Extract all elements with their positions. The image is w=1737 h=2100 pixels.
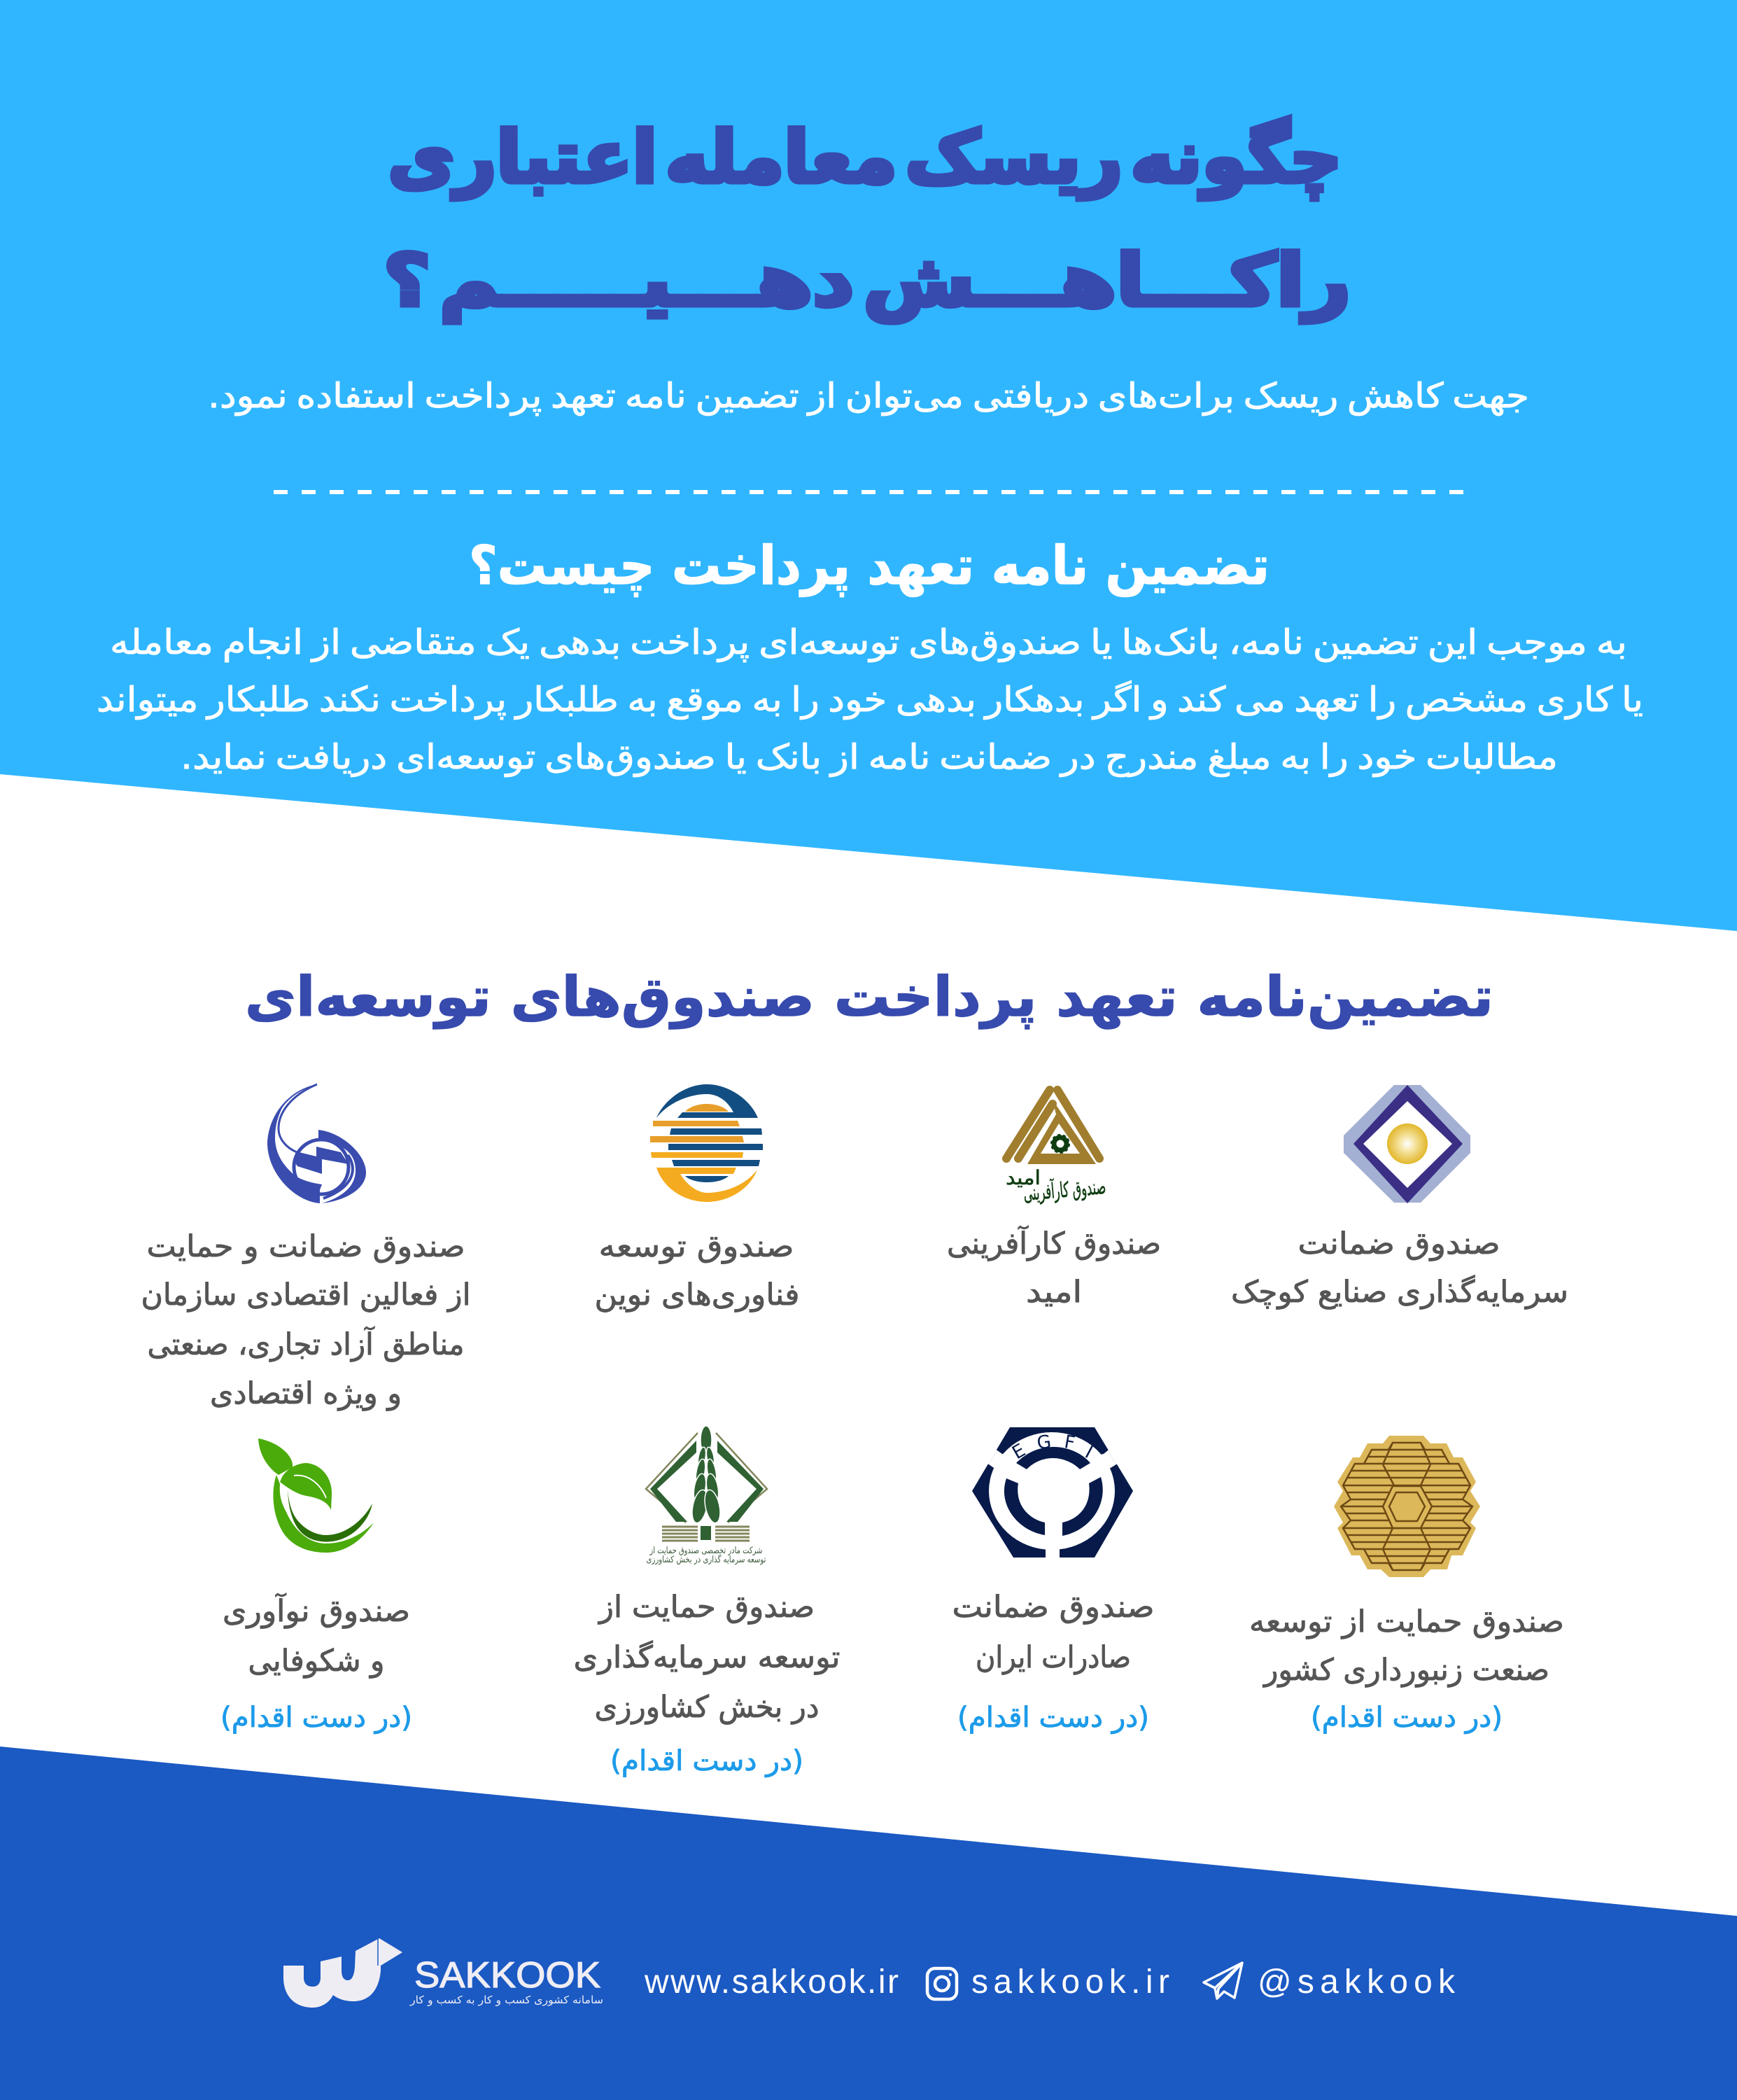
- title: چگونه ریسک معامله اعتباری: [388, 116, 1342, 200]
- instagram handle: sakkook.ir: [971, 1963, 1169, 2001]
- fund 5 label: صندوق حمایت از توسعه: [1249, 1604, 1564, 1639]
- panel: fund 7 agriculture: [574, 1426, 840, 1777]
- body paragraph: [97, 622, 1643, 777]
- panel: top light-blue header band: [0, 0, 1737, 931]
- panel: fund 4 free zones: [141, 1084, 470, 1411]
- icon: striped globe logo: [650, 1084, 763, 1202]
- heading: what is a payment guarantee: تضمین نامه تعهد پرداخت چیست؟: [469, 534, 1270, 597]
- fund 4 label: مناطق آزاد تجاری، صنعتی: [147, 1326, 465, 1362]
- heading: development funds: تضمین‌نامه تعهد پرداخت صندوق‌های توسعه‌ای: [245, 966, 1493, 1029]
- panel: fund 5 beekeeping: [1249, 1436, 1564, 1734]
- fund 6 status: (در دست اقدام): [957, 1702, 1149, 1734]
- fund 3 label: [595, 1229, 799, 1312]
- fund 5 label: صنعت زنبورداری کشور: [1263, 1653, 1549, 1688]
- icon: wheat logo: [646, 1426, 767, 1565]
- fund 8 label: و شکوفایی: [248, 1644, 385, 1679]
- panel: fund 8 innovation: [220, 1438, 412, 1734]
- fund 7 status: (در دست اقدام): [610, 1745, 803, 1777]
- website: www.sakkook.ir: [644, 1963, 899, 2001]
- fund 1 label: سرمایه‌گذاری صنایع کوچک: [1231, 1275, 1568, 1310]
- icon: diamond logo: [1344, 1085, 1470, 1203]
- fund 8 status: (در دست اقدام): [220, 1702, 412, 1734]
- fund 2 label: صندوق کارآفرینی: [947, 1225, 1161, 1261]
- fund 7 label: توسعه سرمایه‌گذاری: [574, 1640, 840, 1675]
- title: [384, 116, 1351, 323]
- icon: Omid triangle logo: [1006, 1090, 1106, 1206]
- icon: wheat logo: توسعه سرمایه گذاری در بخش کشاورزی: [647, 1554, 766, 1565]
- icon: EGFI hexagon logo: [969, 1427, 1135, 1559]
- fund 6 label: صندوق ضمانت: [952, 1590, 1155, 1625]
- telegram handle: @sakkook: [1258, 1963, 1456, 2001]
- icon: Sakkook logo mark: [283, 1938, 402, 2008]
- fund 5 status: (در دست اقدام): [1311, 1702, 1503, 1734]
- body paragraph: مطالبات خود را به مبلغ مندرج در ضمانت نامه از بانک یا صندوق‌های توسعه‌ای دریافت نماید.: [181, 737, 1558, 777]
- icon: telegram plane: [1204, 1963, 1242, 1998]
- body paragraph: یا کاری مشخص را تعهد می کند و اگر بدهکار بدهی خود را به موقع به طلبکار پرداخت نکند طلبکار میتواند: [97, 680, 1643, 720]
- icon: green sprout logo: [258, 1438, 374, 1553]
- panel: fund 3 new technologies: [595, 1084, 799, 1312]
- title: راکـــاهـــش دهـــیـــــم ؟: [384, 239, 1351, 323]
- panel: bottom dark-blue footer band: [0, 1746, 1737, 2100]
- icon: Omid triangle logo: صندوق کارآفرینی: [1022, 1174, 1106, 1206]
- panel: fund 1 small industries guarantee: [1231, 1085, 1568, 1310]
- panel: footer branding and contacts: [283, 1938, 1456, 2008]
- icon: wheat logo: شرکت مادر تخصصی صندوق حمایت از: [649, 1546, 763, 1556]
- icon: EGFI hexagon logo: F: [1062, 1432, 1076, 1454]
- panel: fund 6 export guarantee: [952, 1427, 1155, 1734]
- icon: EGFI hexagon logo: E: [1008, 1440, 1029, 1464]
- intro sentence: جهت کاهش ریسک برات‌های دریافتی می‌توان از تضمین نامه تعهد پرداخت استفاده نمود.: [208, 376, 1529, 416]
- logo tagline: سامانه کشوری کسب و کار به کسب و کار: [409, 1994, 603, 2006]
- fund 7 label: در بخش کشاورزی: [595, 1690, 819, 1725]
- fund 2 label: امید: [1026, 1275, 1082, 1310]
- body paragraph: به موجب این تضمین نامه، بانک‌ها یا صندوق‌های توسعه‌ای پرداخت بدهی یک متقاضی از انجام معامله: [110, 622, 1627, 662]
- logo wordmark: SAKKOOK: [414, 1955, 600, 1996]
- icon: honeycomb logo: [1330, 1436, 1484, 1577]
- fund 3 label: صندوق توسعه: [599, 1229, 794, 1264]
- fund 5 label: [1249, 1604, 1564, 1688]
- icon: Omid triangle logo: امید: [1006, 1166, 1041, 1189]
- fund 4 label: [141, 1229, 470, 1411]
- fund 4 label: و ویژه اقتصادی: [210, 1376, 402, 1411]
- fund 4 label: از فعالین اقتصادی سازمان: [141, 1278, 470, 1312]
- fund 4 label: صندوق ضمانت و حمایت: [147, 1229, 465, 1264]
- fund 6 label: [952, 1590, 1155, 1675]
- fund 1 label: [1231, 1226, 1568, 1310]
- fund 1 label: صندوق ضمانت: [1298, 1226, 1500, 1261]
- fund 3 label: فناوری‌های نوین: [595, 1278, 799, 1312]
- fund 7 label: صندوق حمایت از: [598, 1590, 815, 1625]
- icon: instagram: [927, 1968, 957, 1999]
- icon: EGFI hexagon logo: I: [1081, 1442, 1096, 1463]
- icon: spiral logo: [267, 1084, 366, 1203]
- fund 6 label: صادرات ایران: [976, 1640, 1131, 1675]
- fund 7 label: [574, 1590, 840, 1725]
- fund 2 label: [947, 1225, 1161, 1310]
- panel: fund 2 Omid entrepreneurship: [947, 1090, 1161, 1310]
- icon: EGFI hexagon logo: G: [1036, 1432, 1053, 1454]
- fund 8 label: صندوق نوآوری: [223, 1592, 410, 1629]
- fund 8 label: [223, 1592, 410, 1679]
